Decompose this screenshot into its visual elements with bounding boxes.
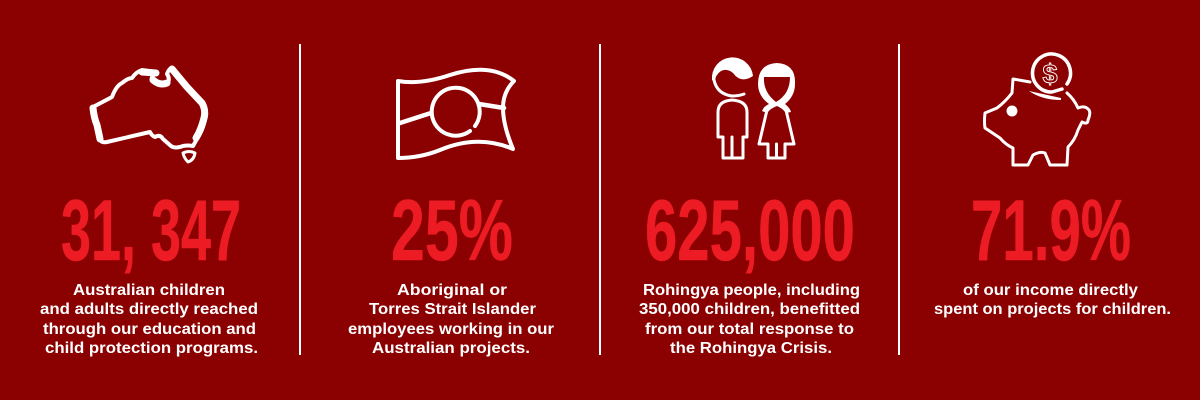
icon: piggy bank with coin — [984, 54, 1090, 165]
text: employees description: Aboriginal or — [397, 282, 507, 299]
statistic: 25%: 25% — [391, 183, 513, 279]
text: Australian description: child protection programs. — [45, 340, 258, 357]
text: Rohingya description: from our total response to — [645, 321, 854, 338]
statistic: 625,000: 625,000 — [645, 183, 855, 279]
icon: map of Australia — [93, 68, 206, 162]
text: employees description: Australian projects. — [372, 340, 530, 357]
text: income description: spent on projects for children. — [934, 301, 1171, 318]
text: Australian description — [40, 282, 258, 357]
icon: Aboriginal flag — [398, 70, 514, 158]
text: Rohingya description: Rohingya people, including — [643, 282, 860, 299]
text: employees description: employees working in our — [348, 321, 554, 338]
text: Rohingya description: 350,000 children, benefitted — [639, 301, 860, 318]
panel: Rohingya response — [639, 57, 860, 357]
text: employees description — [348, 282, 554, 357]
text: Australian description: Australian children — [73, 282, 225, 299]
statistic: 31, 347: 31, 347 — [61, 183, 241, 279]
icon: piggy bank with coin: $ — [1042, 59, 1058, 89]
icon: two children — [712, 57, 795, 158]
text: Australian description: and adults directly reached — [40, 301, 258, 318]
text: Rohingya description — [639, 282, 860, 357]
panel: Australian reach — [40, 68, 258, 357]
text: income description: of our income directly — [963, 282, 1138, 299]
text: Australian description: through our education and — [43, 321, 256, 338]
text: employees description: Torres Strait Islander — [369, 301, 536, 318]
panel: income spent — [934, 54, 1171, 318]
panel: Aboriginal employees — [348, 70, 554, 357]
text: income description — [934, 282, 1171, 318]
text: Rohingya description: the Rohingya Crisis. — [670, 340, 832, 357]
